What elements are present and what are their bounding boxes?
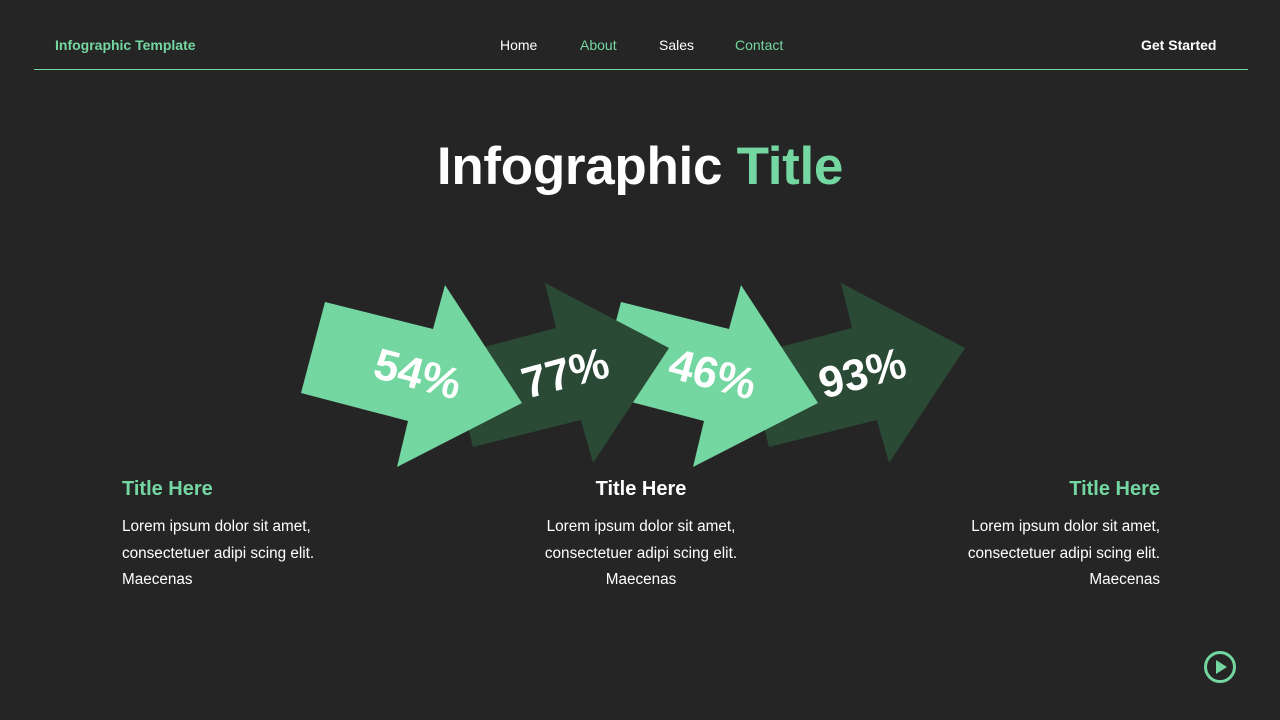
nav menu: Contact bbox=[735, 37, 783, 53]
arrow 1: 54% bbox=[369, 339, 466, 410]
icon: play button bbox=[1204, 651, 1236, 683]
nav menu: Home bbox=[500, 37, 537, 53]
title: Infographic Title bbox=[437, 137, 843, 196]
column 2: Lorem ipsum dolor sit amet, consectetuer adipi scing elit. Maecenas bbox=[545, 518, 737, 588]
column 3: Lorem ipsum dolor sit amet, consectetuer adipi scing elit. Maecenas bbox=[968, 518, 1160, 588]
arrow 2 bbox=[450, 283, 669, 463]
column 2 bbox=[545, 478, 737, 588]
arrow 4: 93% bbox=[814, 338, 911, 409]
column 3 bbox=[968, 478, 1160, 588]
column 1: Lorem ipsum dolor sit amet, consectetuer adipi scing elit. Maecenas bbox=[122, 518, 314, 588]
column 2: Title Here bbox=[596, 478, 686, 500]
arrow 4 bbox=[746, 283, 965, 463]
column 1: Title Here bbox=[122, 478, 213, 500]
get started: Get Started bbox=[1141, 37, 1216, 53]
arrow 3: 46% bbox=[664, 339, 761, 410]
arrow 2: 77% bbox=[517, 338, 614, 409]
nav menu bbox=[500, 37, 784, 53]
arrow 1 bbox=[301, 285, 522, 467]
column 1 bbox=[122, 478, 314, 588]
brand: Infographic Template bbox=[55, 37, 196, 53]
nav menu: About bbox=[580, 37, 617, 53]
nav menu: Sales bbox=[659, 37, 694, 53]
column 3: Title Here bbox=[1069, 478, 1160, 500]
arrow 3 bbox=[597, 285, 818, 467]
